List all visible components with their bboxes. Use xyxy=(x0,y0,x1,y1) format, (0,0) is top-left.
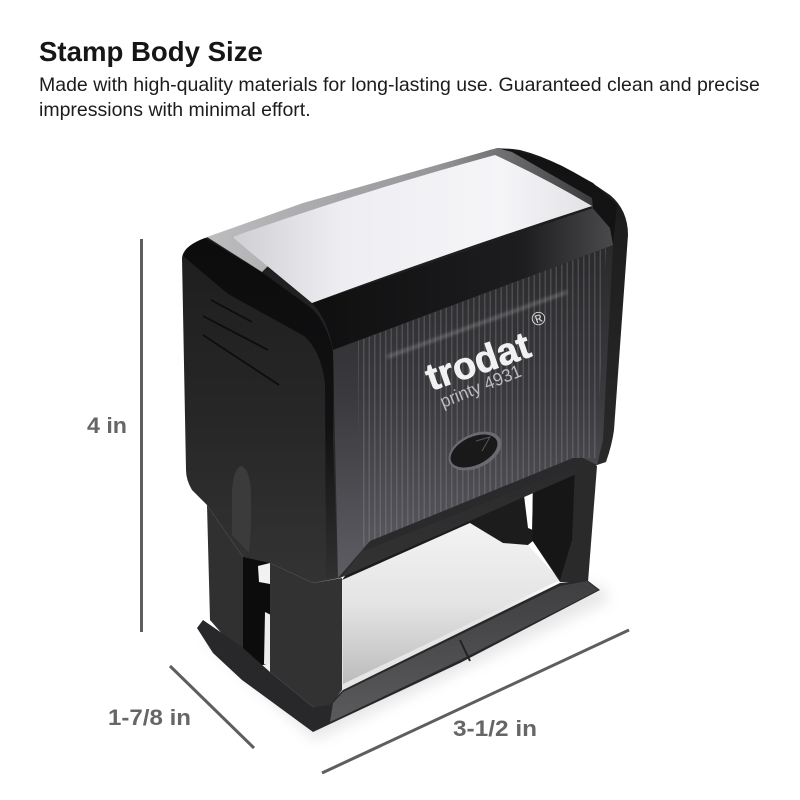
lid band xyxy=(312,208,613,350)
right leg inner shade xyxy=(532,468,575,580)
left legs xyxy=(207,505,245,660)
panel highlight streak xyxy=(387,292,567,357)
front leg xyxy=(270,563,342,707)
width dimension line xyxy=(322,630,629,773)
main shell xyxy=(182,148,628,583)
width label: 3-1/2 in xyxy=(453,716,537,741)
front bar xyxy=(330,581,598,722)
side vent lines xyxy=(203,300,279,385)
stamp xyxy=(182,148,628,732)
model text: printy 4931 xyxy=(437,361,524,412)
paper opening xyxy=(342,523,560,684)
black corner ridge xyxy=(183,238,338,580)
panel lower bevel xyxy=(338,458,583,578)
rear white slit xyxy=(523,484,533,530)
side latch xyxy=(232,466,251,553)
trodat logo: trodat xyxy=(420,325,536,400)
title: Stamp Body Size xyxy=(39,36,263,67)
description text xyxy=(39,74,760,121)
ribbed texture xyxy=(358,248,606,548)
lid highlight xyxy=(207,148,593,272)
depth dimension line xyxy=(170,666,254,748)
height dimension line xyxy=(140,239,143,632)
side gap xyxy=(243,556,271,673)
base plate xyxy=(197,580,600,732)
front panel xyxy=(333,245,613,578)
right leg xyxy=(532,458,597,582)
description text: Made with high-quality materials for long-lasting use. Guaranteed clean and precise xyxy=(39,74,760,96)
base shadow xyxy=(205,585,610,740)
inner mechanism xyxy=(342,478,534,580)
depth label: 1-7/8 in xyxy=(108,705,191,730)
lid top dark edge xyxy=(495,148,617,245)
front bar joint xyxy=(460,640,470,661)
height label: 4 in xyxy=(87,413,127,438)
label window xyxy=(232,155,592,303)
registered mark: ® xyxy=(529,307,549,332)
dial xyxy=(442,424,508,478)
description text: impressions with minimal effort. xyxy=(39,99,311,121)
